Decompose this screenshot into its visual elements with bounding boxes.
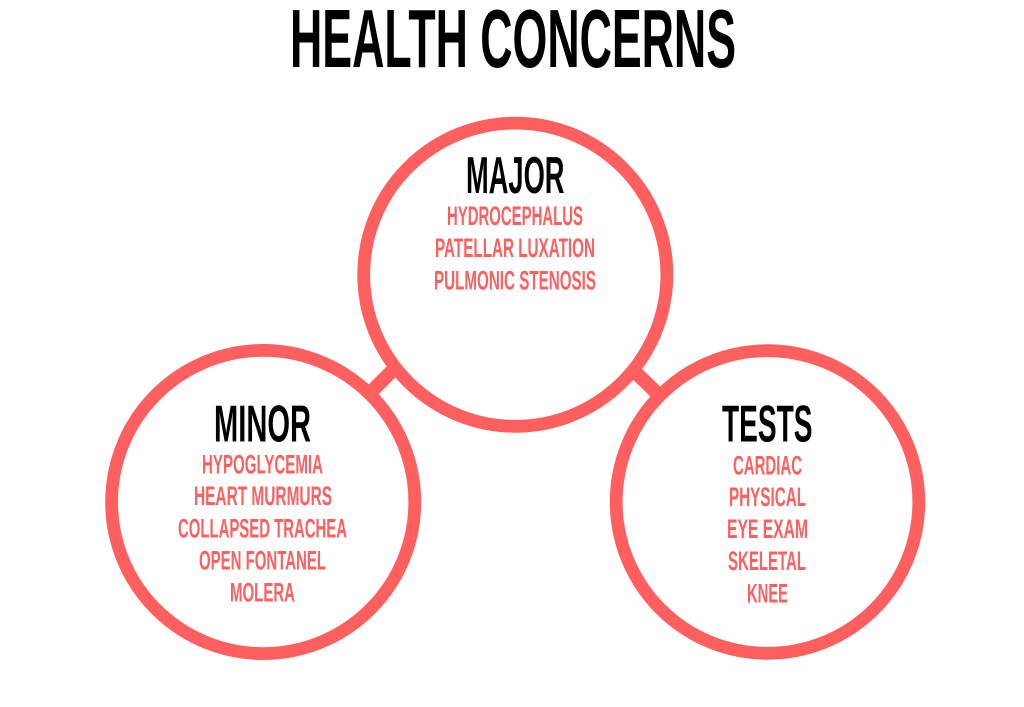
panel: tests: KNEE [747, 578, 788, 608]
panel: minor: HYPOGLYCEMIA [202, 450, 323, 480]
panel: major: PULMONIC STENOSIS [434, 266, 596, 296]
panel: minor: OPEN FONTANEL [199, 546, 326, 576]
panel: major [364, 123, 667, 426]
panel: tests: EYE EXAM [727, 514, 808, 544]
panel: major: HYDROCEPHALUS [447, 201, 583, 231]
connector: major to tests [630, 367, 663, 399]
panel: minor: COLLAPSED TRACHEA [178, 513, 347, 543]
panel: tests: TESTS [722, 396, 812, 454]
panel: tests: CARDIAC [733, 450, 802, 480]
panel: minor: HEART MURMURS [194, 481, 332, 511]
panel: tests: SKELETAL [728, 546, 806, 576]
panel: minor: MINOR [214, 396, 311, 454]
connector: major to minor [366, 364, 399, 397]
panel: tests: PHYSICAL [729, 482, 806, 512]
panel: tests [616, 351, 919, 653]
panel: major: MAJOR [466, 147, 564, 205]
panel: major: PATELLAR LUXATION [435, 233, 595, 263]
panel: minor [112, 350, 415, 654]
panel: minor: MOLERA [230, 578, 295, 608]
